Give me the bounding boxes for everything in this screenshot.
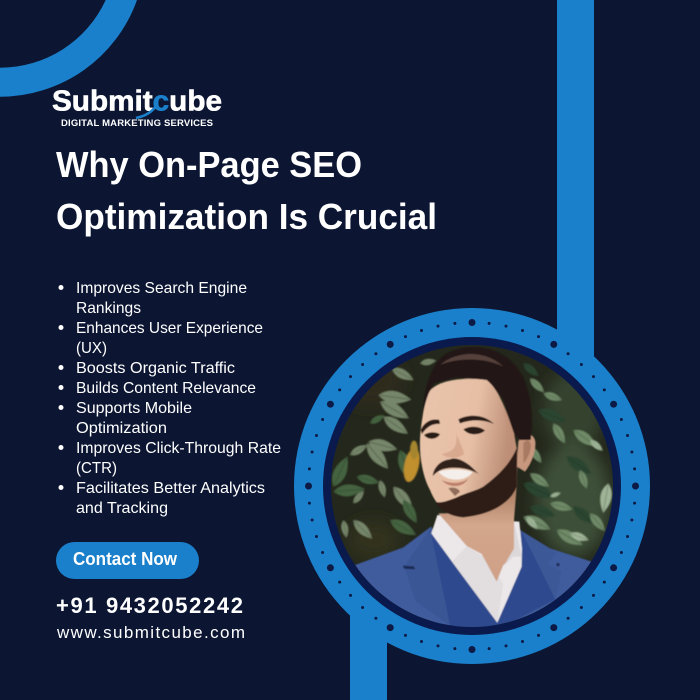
benefits list: Enhances User Experience xyxy=(76,320,263,337)
nose shade xyxy=(442,436,464,458)
neck xyxy=(438,487,517,582)
logo wordmark: Submitcube xyxy=(52,86,222,118)
eyebrows and eyes xyxy=(421,416,494,439)
benefits list: Builds Content Relevance xyxy=(76,380,256,397)
benefits list: Rankings xyxy=(76,300,141,317)
waistcoat xyxy=(431,530,555,628)
shirt xyxy=(431,515,522,623)
benefits list: Improves Search Engine xyxy=(76,280,247,297)
foliage background xyxy=(331,345,613,627)
ring dots xyxy=(305,319,639,653)
benefits list: (UX) xyxy=(76,340,107,357)
moustache xyxy=(433,458,478,476)
benefits list: Optimization xyxy=(76,420,167,437)
logo tagline: DIGITAL MARKETING SERVICES xyxy=(61,118,213,129)
left lapel xyxy=(404,527,457,626)
title xyxy=(56,144,437,237)
right lapel xyxy=(521,532,562,600)
benefits list: Facilitates Better Analytics xyxy=(76,480,265,497)
ear xyxy=(517,434,535,472)
lip shade xyxy=(442,478,468,486)
benefits list: and Tracking xyxy=(76,500,168,517)
beard xyxy=(435,447,517,517)
top-left arc decoration xyxy=(0,0,137,97)
benefits list: Boosts Organic Traffic xyxy=(76,360,235,377)
lapel notch xyxy=(403,566,415,569)
benefits list xyxy=(58,280,281,517)
smile xyxy=(438,469,473,480)
title: Why On-Page SEO xyxy=(56,144,362,185)
benefits list: (CTR) xyxy=(76,460,117,477)
contact button: Contact Now xyxy=(73,549,178,569)
hair xyxy=(423,347,532,440)
face xyxy=(420,379,518,517)
contact button xyxy=(56,542,199,579)
phone number: +91 9432052242 xyxy=(56,593,243,618)
logo xyxy=(52,86,222,129)
vertical bar bottom xyxy=(350,610,387,700)
benefits list: Supports Mobile xyxy=(76,400,192,417)
suit jacket xyxy=(355,526,592,627)
person xyxy=(355,346,592,627)
collar shade xyxy=(452,546,503,623)
logo swoosh xyxy=(136,106,156,118)
title: Optimization Is Crucial xyxy=(56,196,437,237)
vertical bar top right xyxy=(557,0,594,372)
cheek shade xyxy=(503,407,517,473)
photo ring xyxy=(294,308,650,664)
benefits list: Improves Click-Through Rate xyxy=(76,440,281,457)
hair highlight xyxy=(440,354,503,367)
collar right xyxy=(503,522,522,567)
portrait photo xyxy=(331,345,613,627)
website: www.submitcube.com xyxy=(56,623,245,642)
yellow leaf xyxy=(402,450,420,483)
